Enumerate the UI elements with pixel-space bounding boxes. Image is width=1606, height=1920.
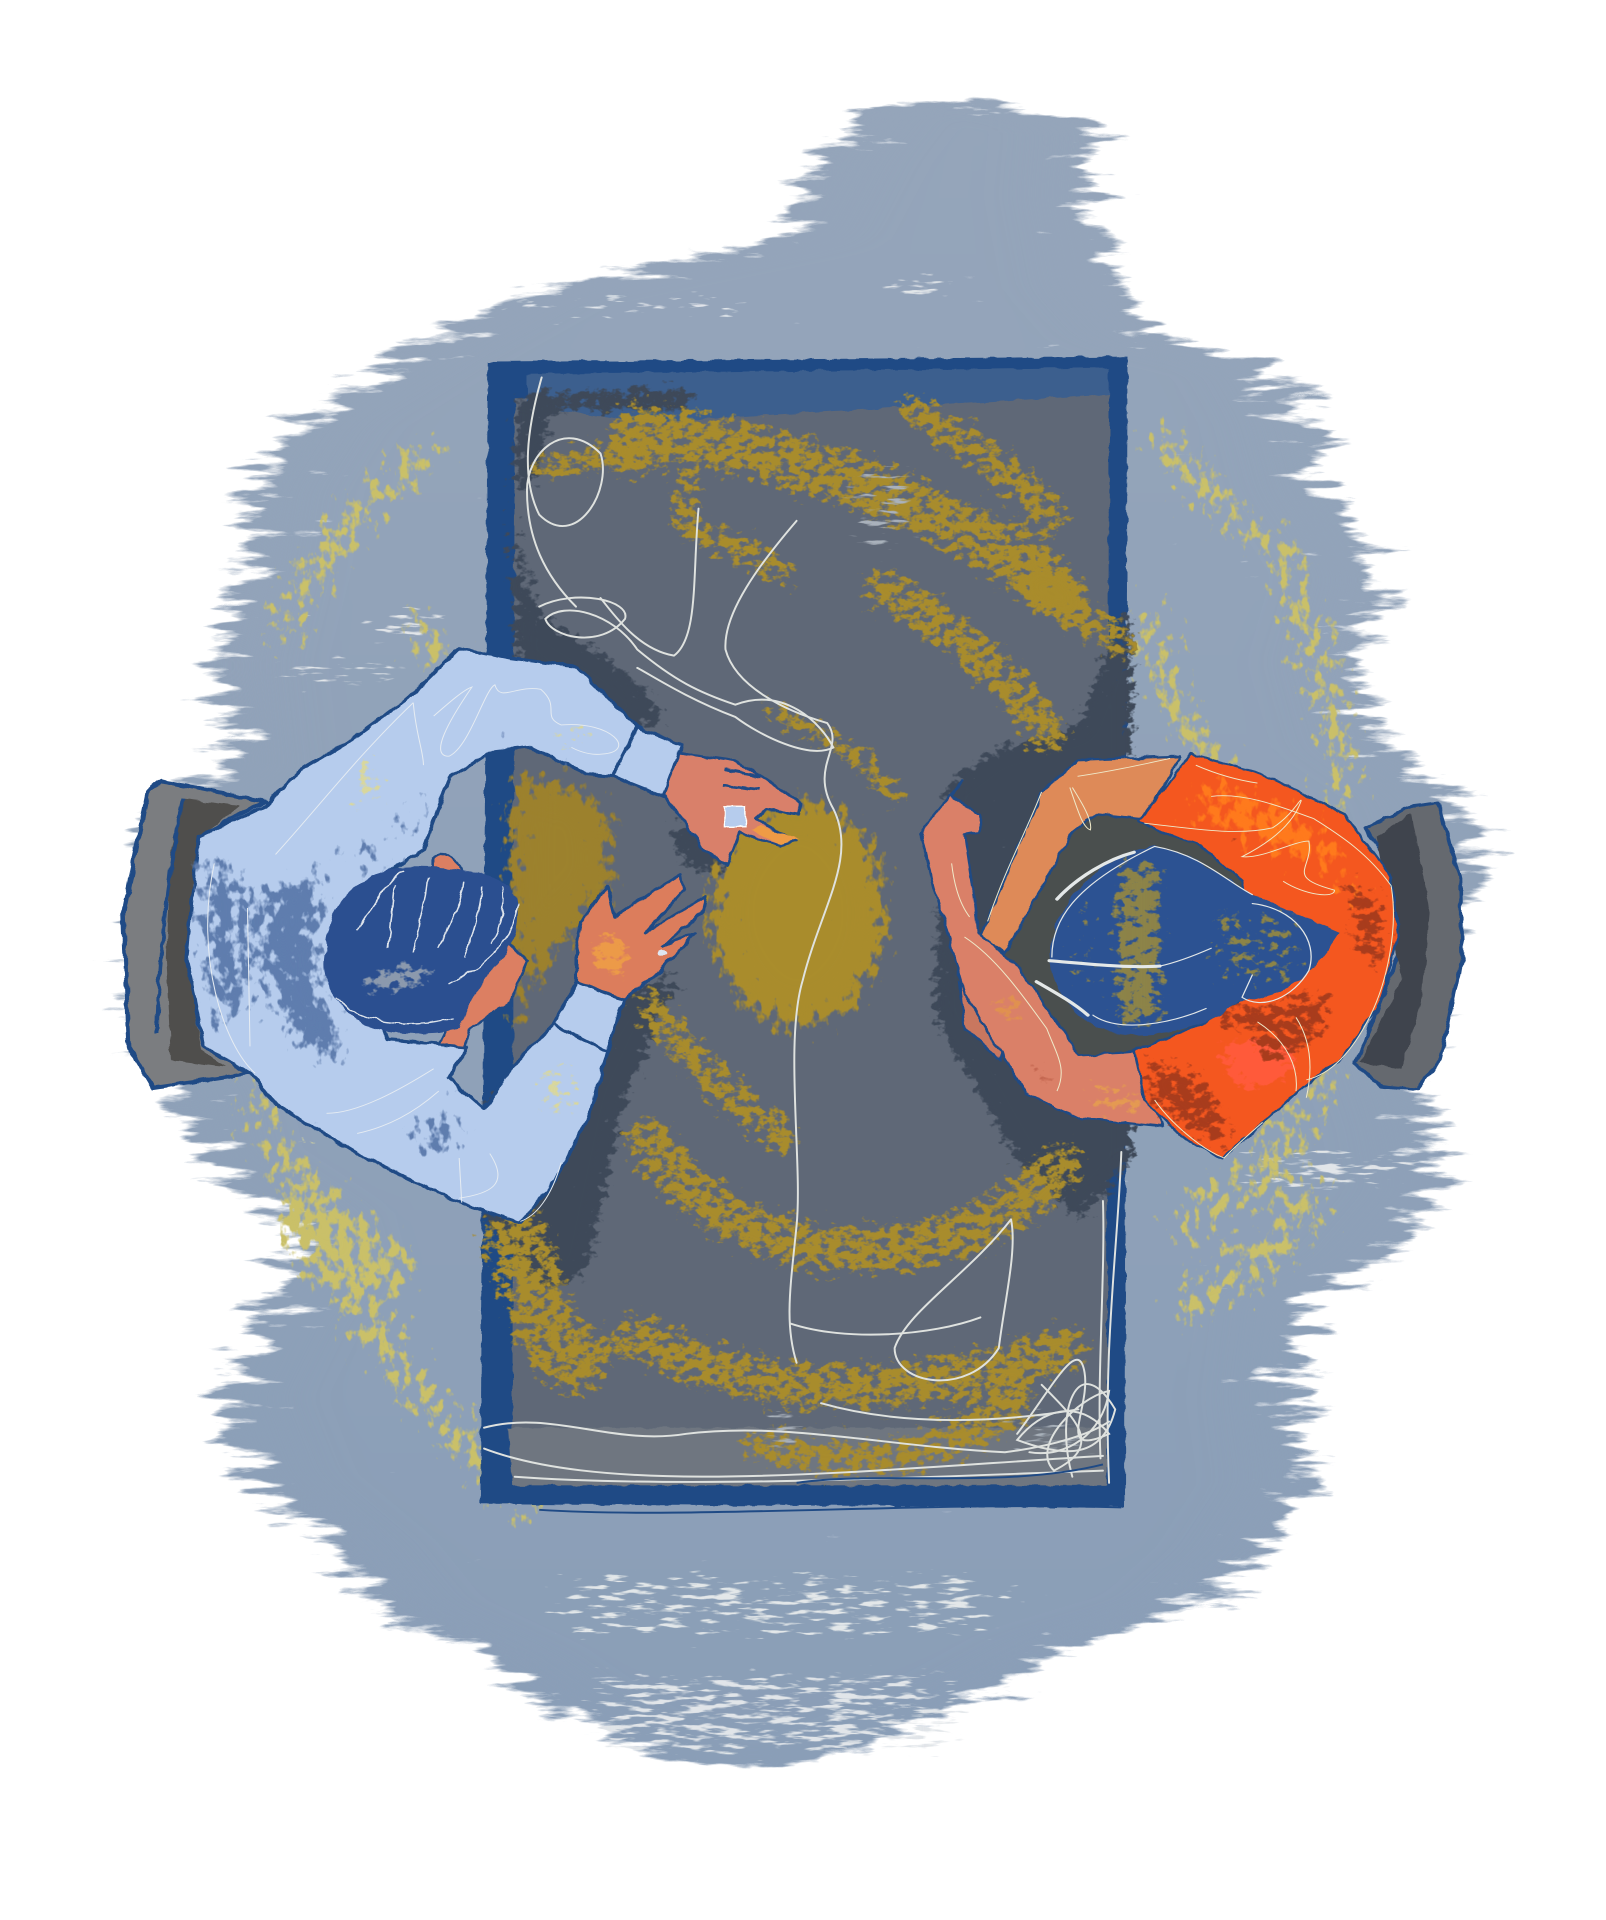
shirt dark red patches — [1134, 823, 1394, 1154]
blue under-sketch lines below the table — [539, 1464, 1121, 1513]
cuff: lower — [554, 982, 623, 1052]
white speckle streaks on the brush blob — [276, 270, 1422, 1759]
yellow-green swirl marks around the table — [251, 441, 1342, 1507]
hair: woman — [1050, 846, 1341, 1035]
hair: grey highlight — [347, 962, 439, 993]
yellow strip on table, left — [505, 766, 619, 1078]
hand: upper with ring — [663, 753, 801, 866]
dark shadows on the table — [484, 386, 1134, 1299]
forearm: under arm — [959, 756, 1180, 1060]
central yellow glow on table — [706, 795, 890, 1031]
hand: orange glow — [592, 935, 633, 979]
dark gap between arms and head — [982, 787, 1288, 1055]
chair: left — [123, 781, 265, 1087]
ear and neck — [434, 854, 528, 1046]
arm and hand: front — [921, 781, 1162, 1127]
hair ochre streaks — [1062, 859, 1304, 1029]
pale chalk marks on the table — [637, 417, 1091, 1471]
panel: table top — [480, 357, 1127, 1507]
hair: man — [324, 867, 518, 1034]
shirt bright coral patch — [1211, 1029, 1299, 1096]
white contour scribbles on the shirt — [208, 685, 619, 1221]
left figure: man in light blue shirt — [123, 648, 801, 1223]
right figure: woman in orange shirt — [921, 754, 1462, 1159]
cuff: upper — [612, 727, 681, 796]
shirt bright patches — [1170, 765, 1386, 957]
golden yellow swirl strokes on the table — [515, 411, 1121, 1458]
white scribble lines across the table — [484, 377, 1121, 1483]
hair highlights — [1036, 846, 1311, 1025]
shirt pale yellow flecks — [265, 712, 612, 1162]
chair: right — [1355, 803, 1462, 1090]
pale scribbles on arms and shirt — [952, 758, 1393, 1158]
arm tints — [990, 988, 1150, 1118]
background paint brush blob — [137, 96, 1489, 1771]
shirt and sleeves — [186, 648, 681, 1223]
shirt shading — [196, 671, 612, 1162]
hand: lower with wedding ring — [577, 875, 707, 1000]
orange shirt — [1134, 754, 1399, 1159]
